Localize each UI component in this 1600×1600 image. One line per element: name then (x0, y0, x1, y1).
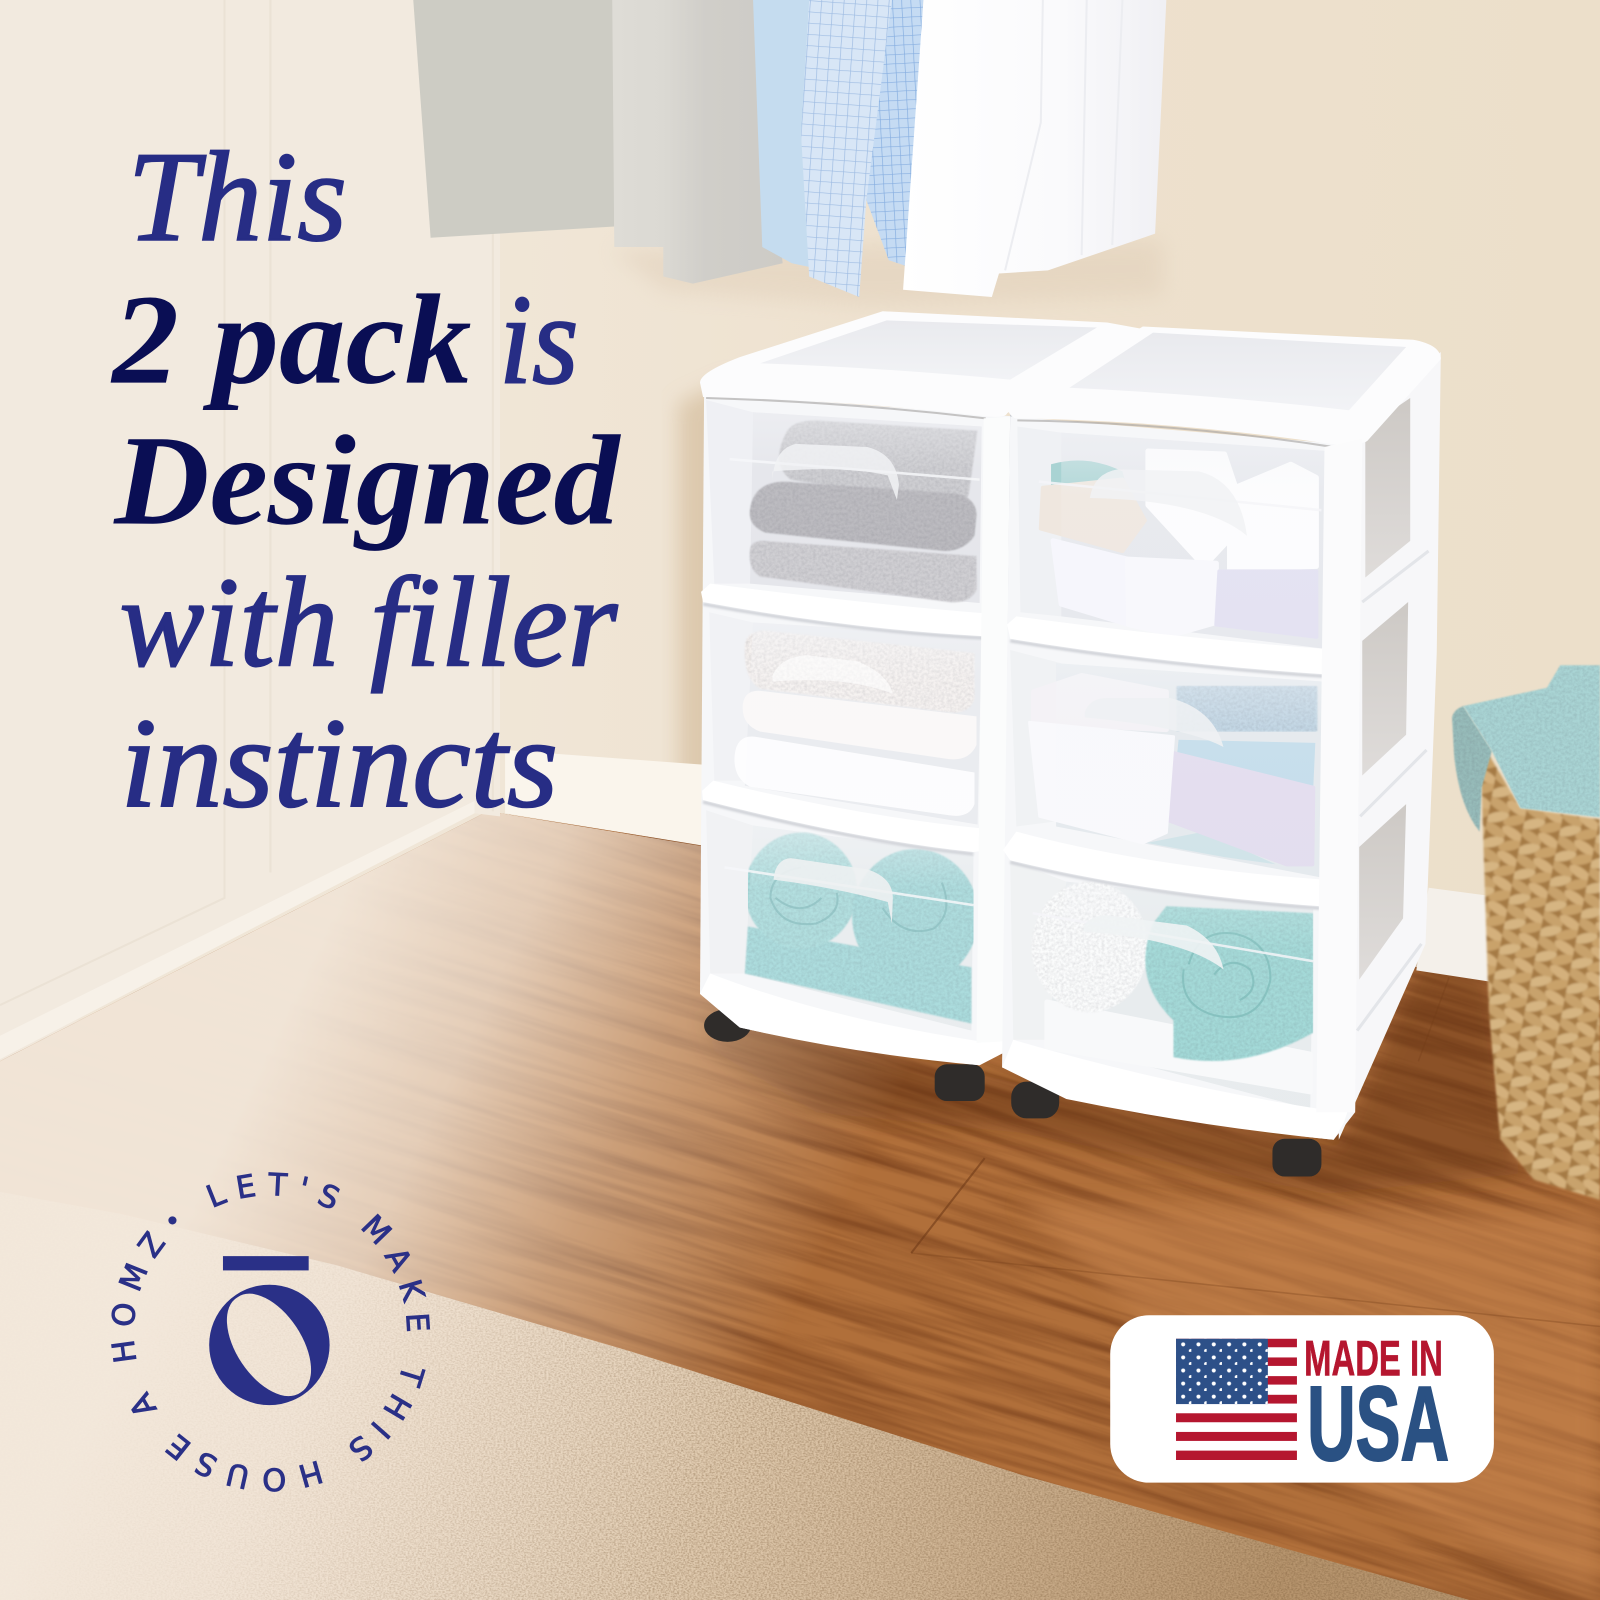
made in usa badge (1110, 1315, 1494, 1483)
logo o (209, 1285, 330, 1405)
separators (703, 604, 997, 639)
flag (1176, 1339, 1297, 1460)
right post (977, 416, 1013, 1043)
product: left drawer tower (700, 311, 1141, 1101)
line: 2 pack is: 2 pack (110, 268, 471, 411)
headline (110, 125, 621, 834)
body (700, 393, 1013, 1065)
background: wall (0, 0, 1600, 1020)
line: Designed: Designed (113, 408, 621, 551)
plaid shirt (801, 0, 923, 297)
side rails shading (1357, 551, 1429, 1031)
white shirt (903, 0, 1166, 297)
drawer 2 window and clothes (1010, 650, 1323, 878)
drawer 3 window and towels (1031, 882, 1314, 1108)
line: This: This (128, 125, 347, 268)
floor haze (0, 811, 1020, 1600)
line: with filler: with filler (119, 550, 618, 693)
basket (1481, 756, 1600, 1200)
circular slogan: LET'S MAKE THIS HOUSE A HOMZ (111, 1172, 430, 1492)
taupe shirt (612, 0, 783, 284)
handles and rims (1033, 482, 1321, 961)
light blue shirt (753, 0, 814, 267)
line: 2 pack is: is (499, 268, 579, 411)
background: rug (31, 1234, 1469, 1600)
teal towel (1463, 665, 1600, 817)
dark towel fold (1452, 706, 1492, 832)
lid (1007, 327, 1441, 445)
drawer 3 window and towels (744, 832, 974, 1030)
line: instincts: instincts (120, 691, 558, 834)
wheels (704, 1009, 751, 1042)
frosted front haze (750, 412, 982, 603)
usa text: USA (1307, 1365, 1449, 1483)
drawer 2 window and towels (709, 612, 982, 824)
wheels (1011, 1082, 1059, 1118)
gap shadow (1005, 408, 1012, 1061)
gray garment (413, 0, 614, 238)
separator dot (168, 1216, 177, 1224)
body (1002, 416, 1360, 1140)
lid top plate (1069, 333, 1406, 410)
basket with towel (1452, 665, 1600, 1200)
left wall panel (0, 0, 500, 1059)
handles and rims (724, 459, 980, 905)
brand seal (111, 1172, 430, 1492)
side panel (1337, 352, 1441, 1140)
separators (1010, 641, 1344, 678)
post (1316, 439, 1362, 1112)
frosted front haze (1061, 433, 1327, 649)
baseboards (505, 750, 1490, 982)
product: right drawer tower (1002, 327, 1441, 1177)
lid (700, 311, 1141, 417)
lid top plate (760, 320, 1097, 380)
drawer 1 window and towels (706, 400, 982, 603)
drawer 1 window and clothes (1017, 427, 1327, 649)
side windows (1365, 398, 1410, 578)
background: wood floor (0, 811, 1600, 1600)
made in text: MADE IN (1304, 1331, 1443, 1387)
hanging clothes (413, 0, 1166, 297)
logo bar (223, 1256, 309, 1270)
